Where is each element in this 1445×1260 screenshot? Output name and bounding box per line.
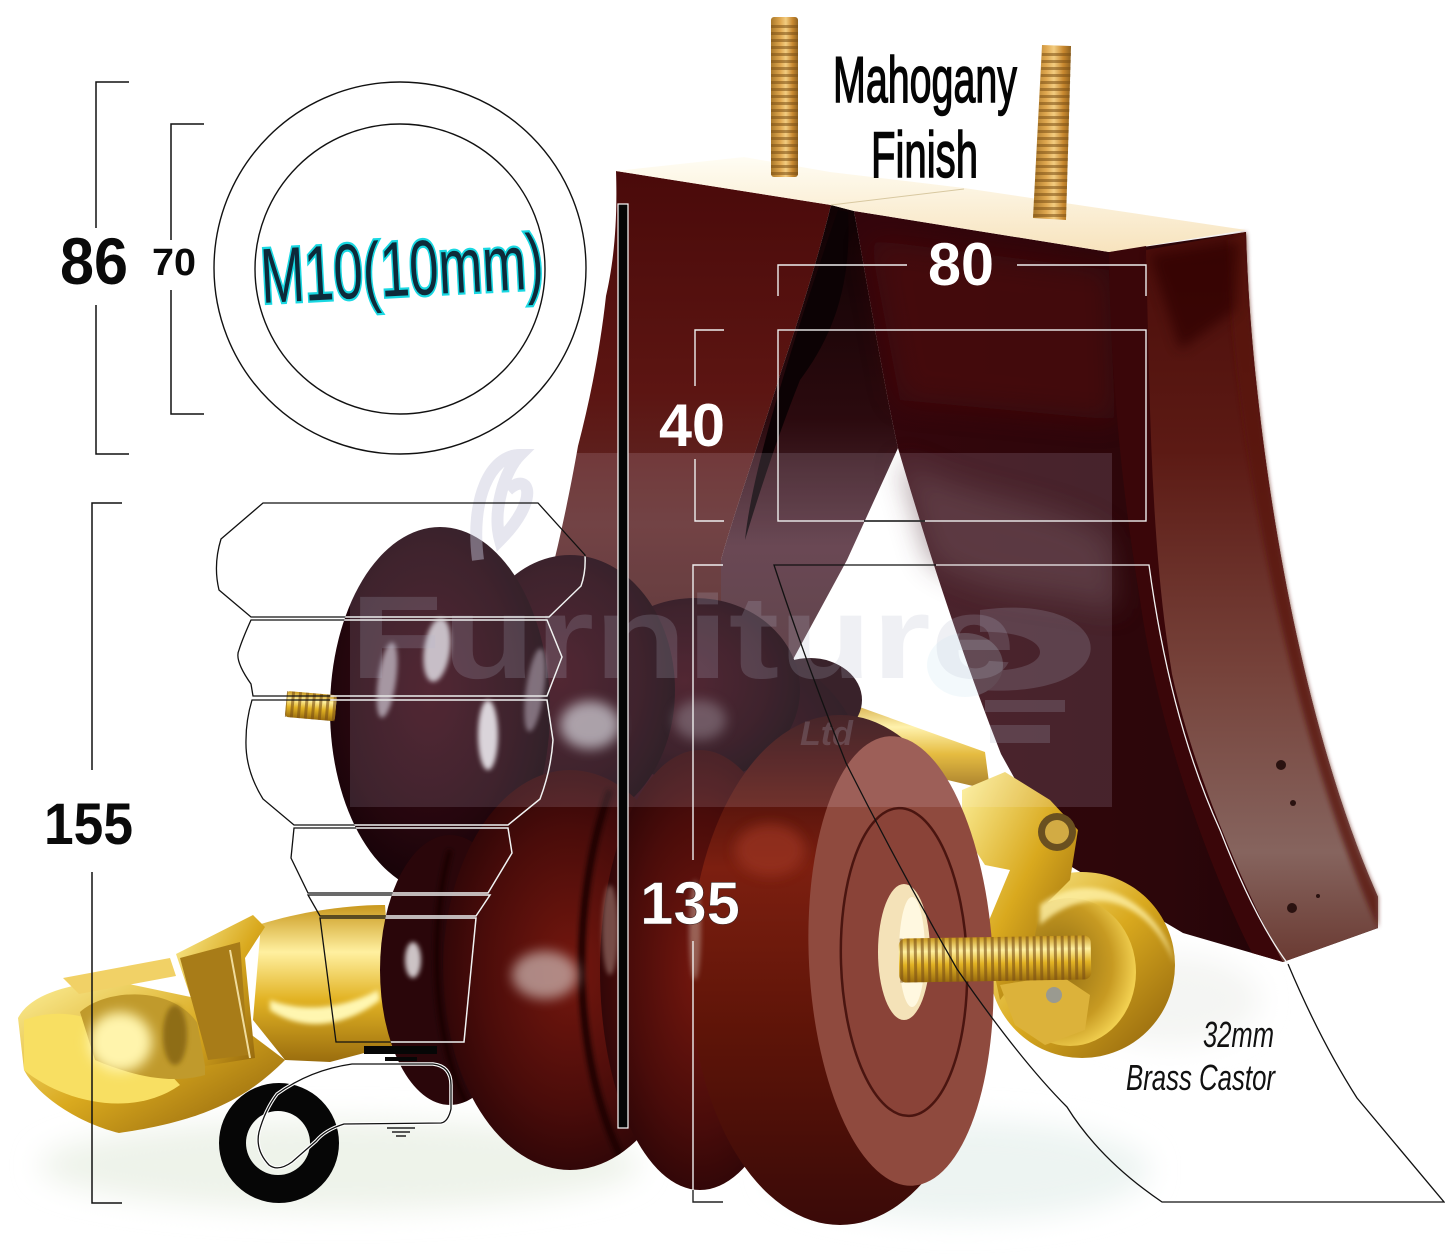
watermark swirl <box>476 455 527 560</box>
outline on wood (white) <box>330 556 586 1043</box>
glossy highlights <box>373 641 401 719</box>
label: 86: 86 <box>60 224 128 298</box>
bulge grooves <box>437 790 625 1165</box>
castor hub <box>80 994 205 1079</box>
icon: front brass castor <box>18 905 395 1133</box>
bracket: 70 <box>171 124 204 414</box>
right leg front sheen <box>900 460 1120 610</box>
right tapered leg body <box>854 211 1378 962</box>
castor neck <box>253 905 395 1062</box>
label: 155: 155 <box>44 792 133 857</box>
label: 40: 40 <box>659 392 725 459</box>
bracket: 86 <box>96 82 129 454</box>
wooden end face <box>797 731 1005 1191</box>
floor shadow <box>40 955 1260 1220</box>
central height bar <box>618 204 628 1128</box>
castor wheel ring <box>18 980 285 1133</box>
castor arm <box>840 700 990 790</box>
bracket: 80 <box>778 265 1146 296</box>
circle dimension: inner 70 <box>255 124 545 414</box>
round leg outline drawing <box>216 503 585 1042</box>
icon: left screw <box>771 17 798 177</box>
icon: rear brass castor <box>840 700 1175 1058</box>
icon: right screw <box>1033 45 1071 220</box>
right leg side face <box>1146 232 1378 962</box>
icon: castor wheel outline <box>219 1064 451 1203</box>
castor plate <box>63 958 176 994</box>
tapered leg outline drawing <box>774 565 1444 1202</box>
bracket: 155 <box>92 503 122 1203</box>
thread size label: M10(10mm) <box>258 217 546 320</box>
left tapered leg face <box>540 171 831 660</box>
cream top of legs <box>616 157 1246 252</box>
icon: front leg stud <box>899 935 1091 983</box>
bracket: 135 <box>693 565 723 1202</box>
caption: 32mm Brass Castor <box>1126 1014 1276 1098</box>
wood blemishes <box>1276 760 1286 770</box>
castor bracket <box>962 772 1078 1000</box>
watermark: furniture logo <box>350 453 1112 807</box>
back turned wooden leg <box>330 527 862 895</box>
icon: ground symbol <box>387 1128 415 1136</box>
left tapered leg side <box>721 205 898 680</box>
watermark name: Furniture <box>350 572 1015 704</box>
label: 135: 135 <box>640 870 740 937</box>
caption: 32mm Brass Castor: Brass Castor <box>1126 1057 1276 1098</box>
watermark suffix: Ltd <box>800 715 854 753</box>
glossy highlights <box>405 942 421 978</box>
castor bracket <box>176 915 265 1066</box>
bracket: 40 <box>695 330 724 521</box>
centre insert <box>878 884 930 1020</box>
heading: Mahogany Finish: Mahogany <box>833 43 1017 116</box>
circle dimension: outer 86 <box>214 82 586 454</box>
right leg corner strip <box>1109 245 1283 962</box>
leg cross section rectangle <box>778 330 1146 521</box>
tapered wooden legs <box>540 171 1378 962</box>
front turned wooden leg <box>380 715 1005 1225</box>
caption: 32mm Brass Castor: 32mm <box>1203 1014 1274 1055</box>
castor inner plate <box>1000 975 1090 1045</box>
end face groove <box>836 806 972 1118</box>
icon: rear leg stud <box>285 691 337 721</box>
black crease <box>745 210 848 540</box>
label: 80: 80 <box>928 231 994 298</box>
label: 70: 70 <box>152 242 196 284</box>
heading: Mahogany Finish <box>833 43 1017 191</box>
castor wheel <box>989 872 1175 1058</box>
side face red edge <box>1228 232 1378 928</box>
icon: collar bars <box>364 1046 437 1061</box>
heading: Mahogany Finish: Finish <box>871 118 978 191</box>
watermark logo mark <box>927 608 1091 743</box>
